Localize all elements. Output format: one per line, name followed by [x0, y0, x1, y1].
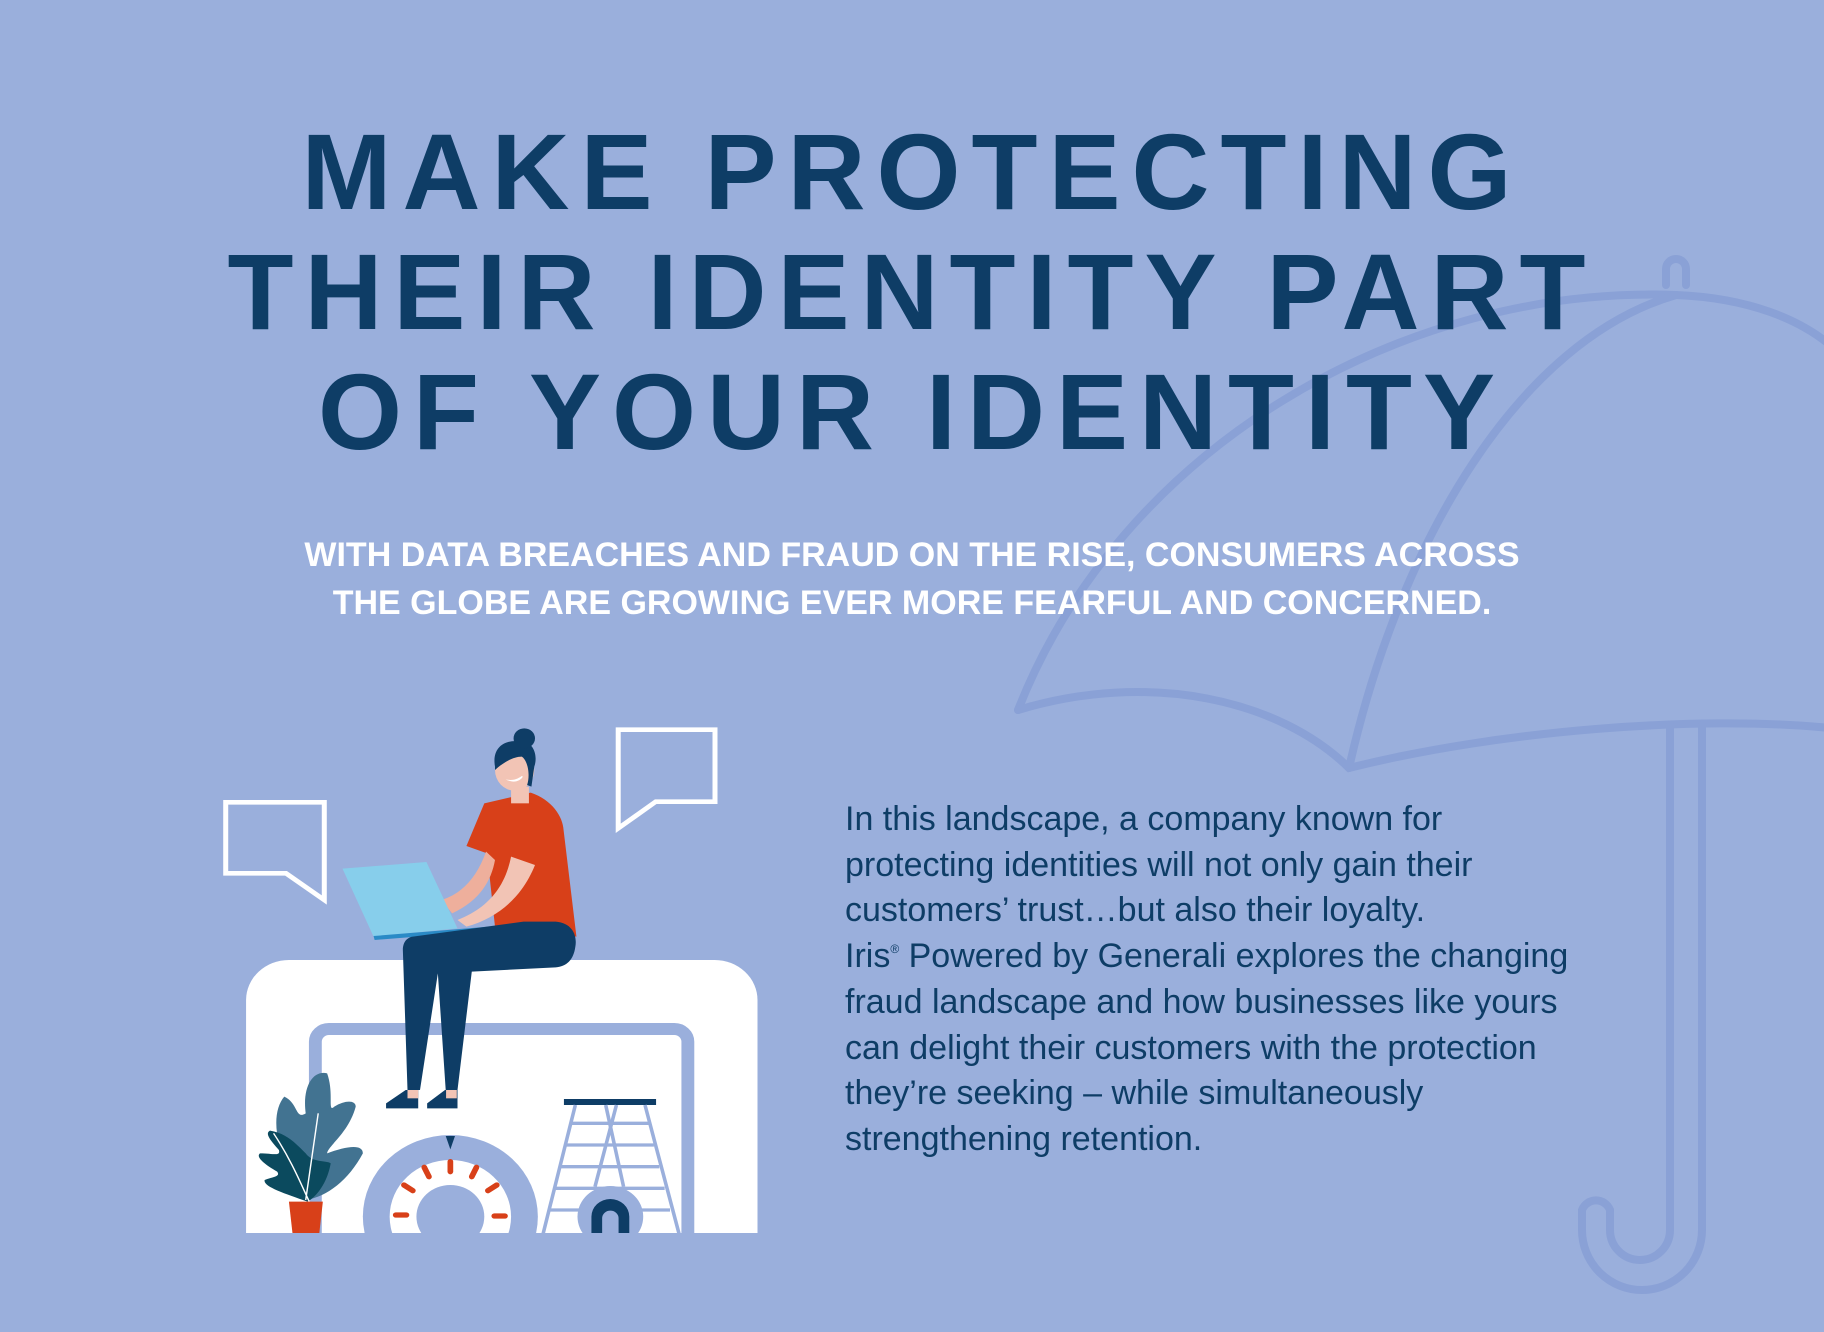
body paragraph: In this landscape, a company known for — [845, 800, 1442, 838]
woman — [342, 728, 576, 1108]
plant — [259, 1073, 363, 1233]
body paragraph: can delight their customers with the protection — [845, 1029, 1537, 1067]
subtitle: WITH DATA BREACHES AND FRAUD ON THE RISE, CONSUMERS ACROSS — [304, 536, 1520, 574]
body paragraph: they’re seeking – while simultaneously — [845, 1074, 1423, 1112]
body paragraph: Iris® Powered by Generali explores the changing — [845, 937, 1568, 975]
title: MAKE PROTECTING — [301, 111, 1522, 232]
title: THEIR IDENTITY PART — [227, 231, 1597, 352]
dial — [363, 1135, 538, 1298]
illustration: woman with laptop on safe — [223, 727, 758, 1233]
body paragraph: protecting identities will not only gain their — [845, 846, 1472, 884]
subtitle — [304, 536, 1520, 622]
keyhole — [578, 1186, 643, 1247]
body paragraph — [845, 800, 1568, 1158]
ladder — [543, 1099, 679, 1233]
title — [227, 111, 1597, 472]
speech bubbles — [226, 730, 715, 900]
body paragraph: strengthening retention. — [845, 1120, 1202, 1158]
body paragraph: fraud landscape and how businesses like yours — [845, 983, 1558, 1021]
title: OF YOUR IDENTITY — [318, 351, 1506, 472]
body paragraph: customers’ trust…but also their loyalty. — [845, 891, 1425, 929]
safe body — [246, 960, 758, 1233]
subtitle: THE GLOBE ARE GROWING EVER MORE FEARFUL AND CONCERNED. — [333, 584, 1491, 622]
